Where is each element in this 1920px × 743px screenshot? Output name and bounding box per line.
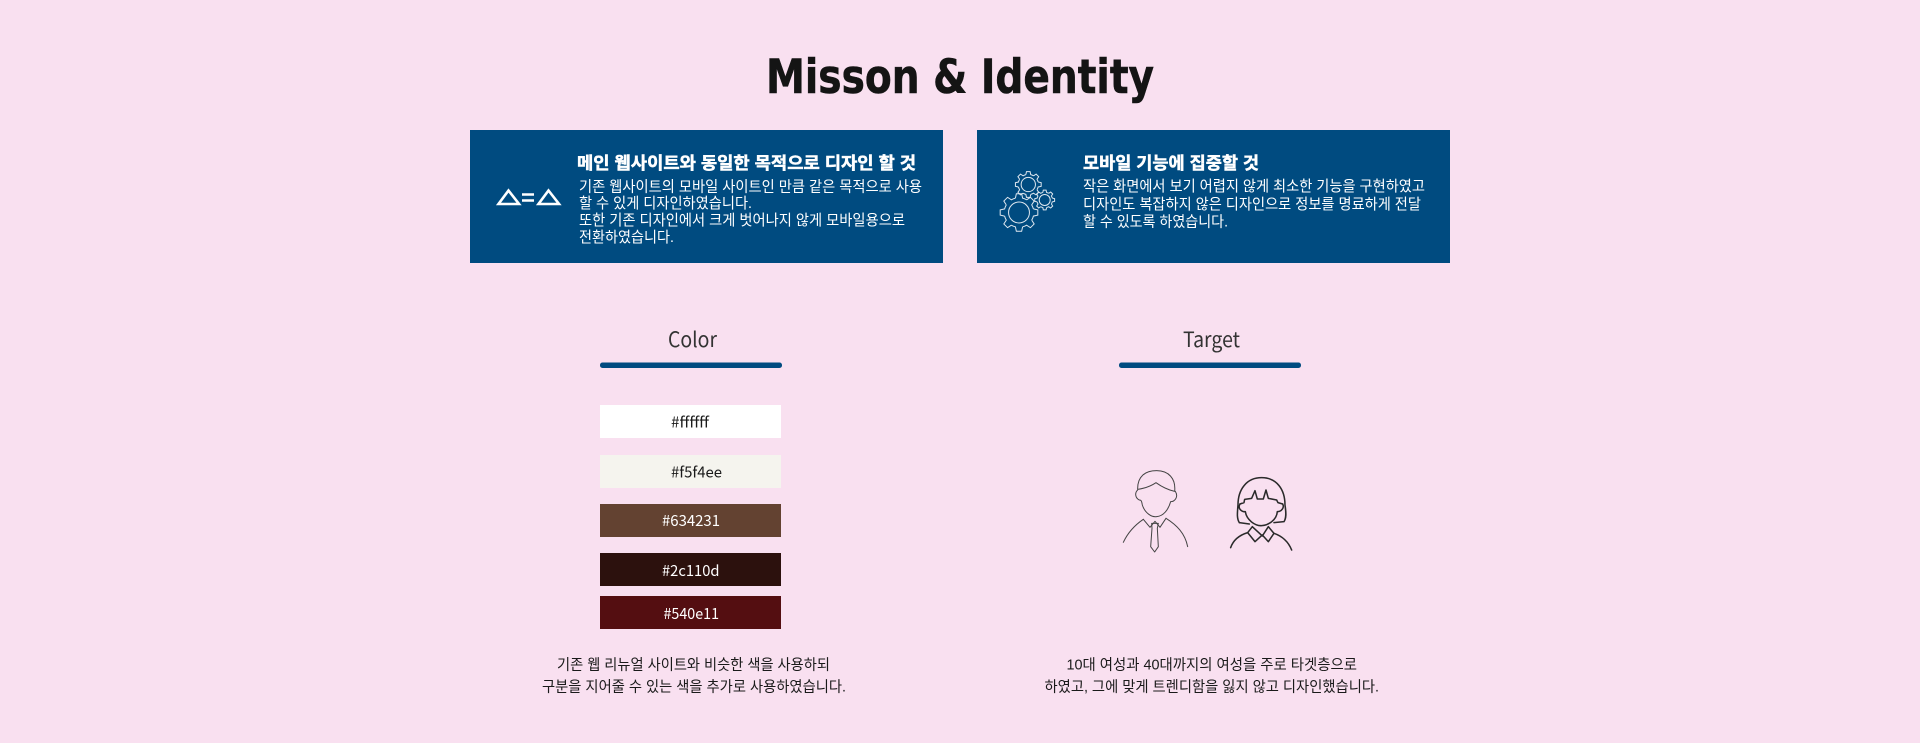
swatch maroon <box>600 596 781 629</box>
title: Misson & Identity <box>766 50 1154 105</box>
panel body text: 작은 화면에서 보기 어렵지 않게 최소한 기능을 구현하였고 <box>1083 178 1425 195</box>
color description: 구분을 지어줄 수 있는 색을 추가로 사용하였습니다. <box>542 678 846 696</box>
panel body text: 또한 기존 디자인에서 크게 벗어나지 않게 모바일용으로 <box>579 212 905 229</box>
swatch off-white: #f5f4ee <box>671 462 722 482</box>
panel body text: 할 수 있도록 하였습니다. <box>1083 214 1228 230</box>
swatch off-white <box>600 455 781 488</box>
section heading: Target: Target <box>1183 324 1240 354</box>
panel body text: 디자인도 복잡하지 않은 디자인으로 정보를 명료하게 전달 <box>1083 196 1421 213</box>
heading underline: Target <box>1119 362 1301 368</box>
swatch white <box>600 405 781 438</box>
icon: woman <box>1231 478 1292 550</box>
target description <box>1044 656 1379 696</box>
color swatches <box>600 405 781 629</box>
heading underline: Color <box>600 362 782 368</box>
swatch brown <box>600 504 781 537</box>
target description: 하였고, 그에 맞게 트렌디함을 잃지 않고 디자인했습니다. <box>1044 678 1379 696</box>
target description: 10대 여성과 40대까지의 여성을 주로 타겟층으로 <box>1066 656 1357 674</box>
panel: same purpose as main website <box>470 130 943 263</box>
swatch maroon: #540e11 <box>664 603 719 624</box>
swatch white: #ffffff <box>671 412 710 432</box>
swatch brown: #634231 <box>662 510 720 531</box>
swatch dark brown <box>600 553 781 586</box>
panel body text: 할 수 있게 디자인하였습니다. <box>579 195 752 212</box>
panel heading: 모바일 기능에 집중할 것 <box>1083 154 1259 173</box>
icon: gears <box>1000 172 1055 231</box>
color description <box>542 656 846 696</box>
swatch dark brown: #2c110d <box>662 560 720 581</box>
panel: focus on mobile features <box>977 130 1450 263</box>
panel heading: 메인 웹사이트와 동일한 목적으로 디자인 할 것 <box>577 154 916 173</box>
panel body text <box>579 178 922 246</box>
panel body text <box>1083 178 1425 230</box>
icon: triangle equals triangle <box>498 190 559 204</box>
icon: man <box>1123 471 1188 552</box>
panel body text: 전환하였습니다. <box>579 229 674 246</box>
panel body text: 기존 웹사이트의 모바일 사이트인 만큼 같은 목적으로 사용 <box>579 178 922 196</box>
section heading: Color: Color <box>668 324 718 354</box>
color description: 기존 웹 리뉴얼 사이트와 비슷한 색을 사용하되 <box>557 656 830 674</box>
